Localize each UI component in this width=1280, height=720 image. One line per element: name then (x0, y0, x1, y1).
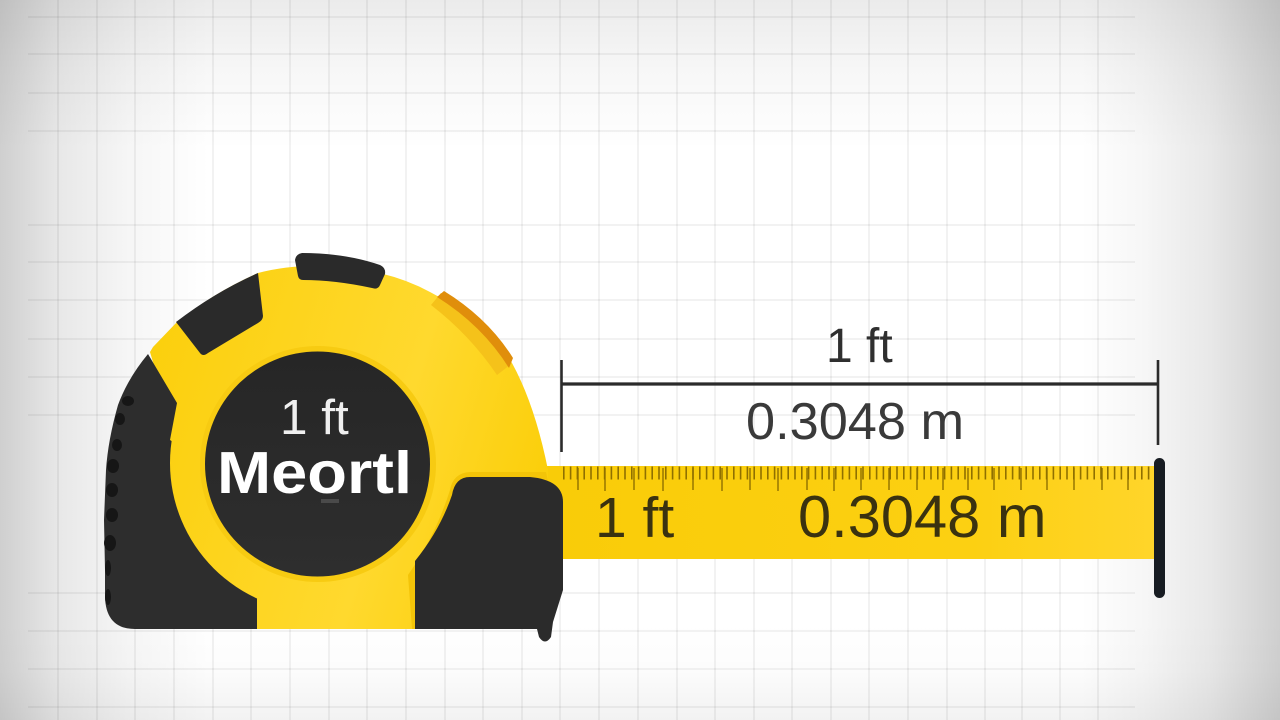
yellow shell (150, 266, 548, 629)
top rubber button (295, 253, 385, 289)
center dial face (205, 352, 430, 576)
tape blade (545, 466, 1155, 559)
dial text: 1 ft: 1 ft (280, 390, 349, 445)
label: 0.3048 m below bracket: 0.3048 m (746, 393, 964, 451)
dimension bracket (561, 360, 1158, 452)
dial text: brand name: Meortl (217, 440, 412, 506)
rear rubber grip (104, 354, 260, 629)
orange slide lock (431, 291, 513, 375)
yellow dial ring (170, 314, 468, 612)
tape outlet band (408, 472, 552, 629)
label: 1 ft above bracket: 1 ft (826, 320, 893, 373)
tape measure housing (104, 253, 563, 642)
top left rubber pad (176, 273, 263, 355)
grip ridges (104, 396, 134, 605)
front rubber block (415, 477, 563, 642)
end stop bar (1154, 458, 1165, 598)
label: 1 ft on tape: 1 ft (595, 486, 674, 550)
ring shading (200, 346, 436, 582)
label: 0.3048 m on tape: 0.3048 m (798, 483, 1046, 550)
